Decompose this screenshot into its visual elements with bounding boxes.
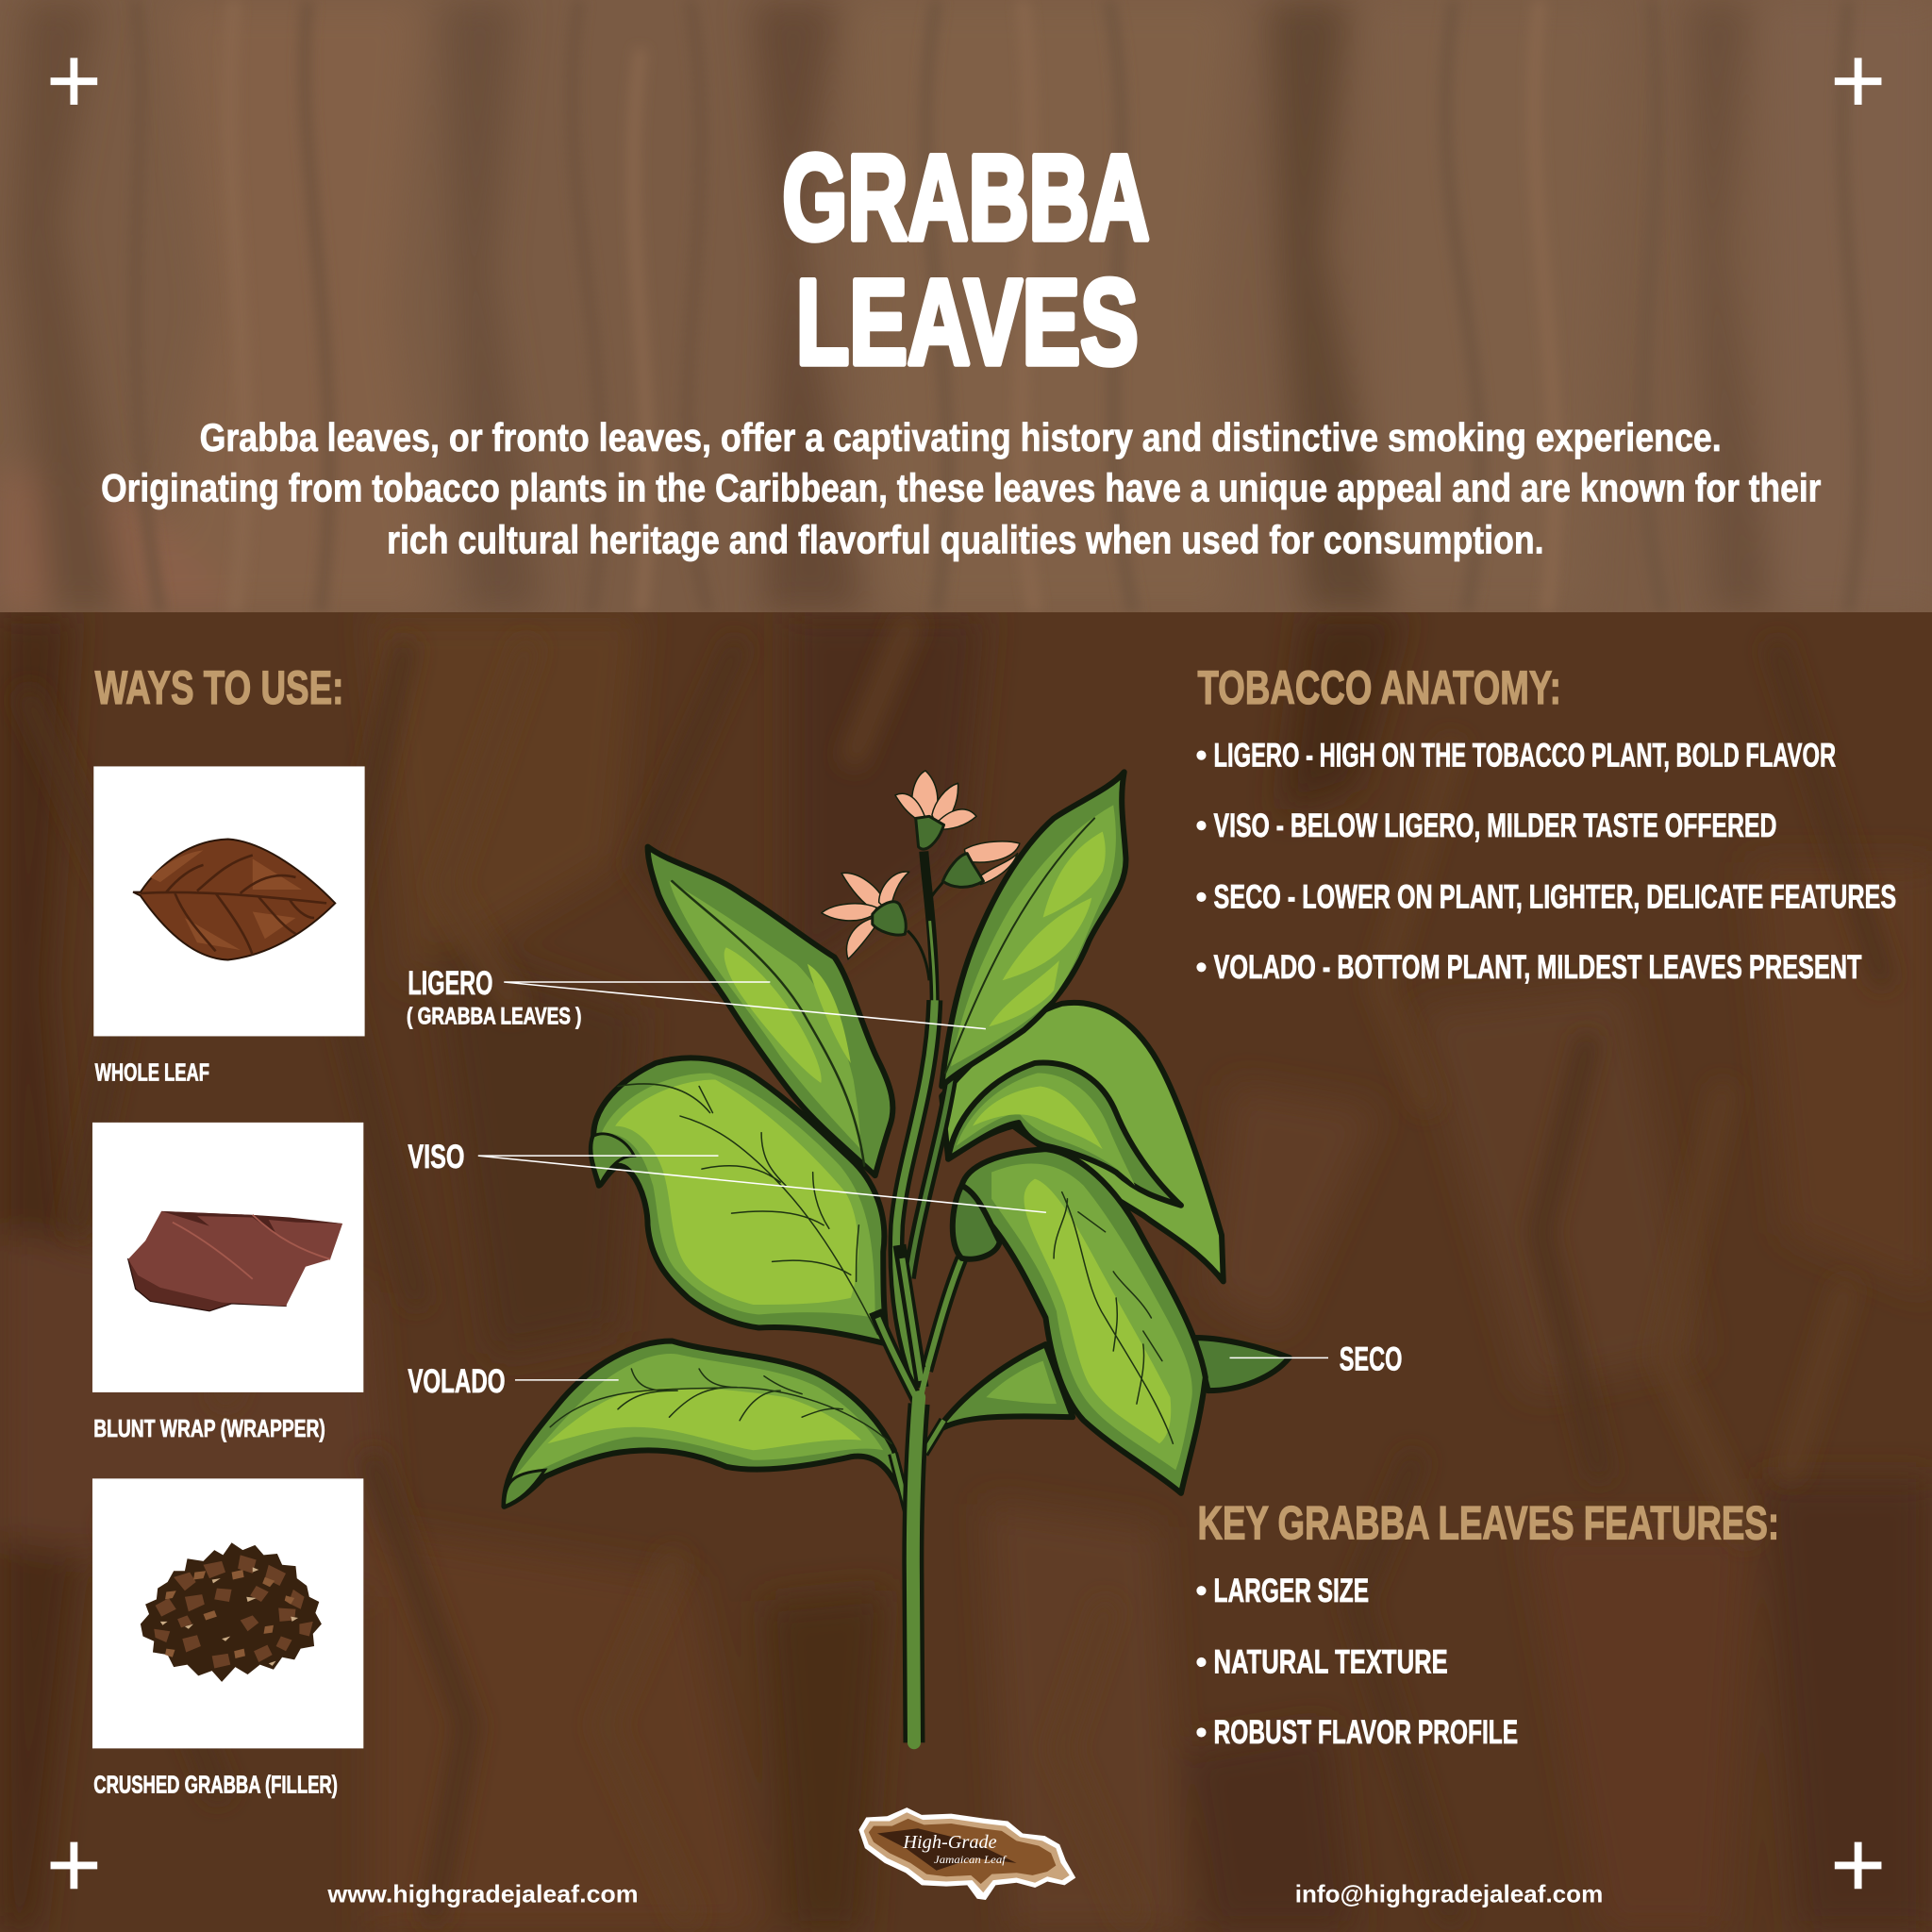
callout: ligero: LIGERO: [408, 965, 492, 1002]
callout: viso: [408, 1139, 1046, 1212]
leaf: viso upper right: [941, 1003, 1224, 1281]
card: crushed grabba: [92, 1478, 363, 1748]
title: GRABBA: [782, 130, 1150, 265]
callout: viso: VISO: [408, 1139, 464, 1175]
callout: volado: VOLADO: [408, 1363, 506, 1400]
caption: crushed grabba: CRUSHED GRABBA (FILLER): [93, 1770, 338, 1798]
intro paragraph: rich cultural heritage and flavorful qualities when used for consumption.: [387, 517, 1544, 561]
background: upper wood band: [0, 0, 1932, 612]
heading: tobacco anatomy: TOBACCO ANATOMY:: [1198, 661, 1561, 714]
leaf: seco: [935, 1338, 1290, 1434]
intro paragraph: Grabba leaves, or fronto leaves, offer a captivating history and distinctive smoking experience.: [200, 415, 1722, 459]
logo: high-grade jamaican leaf: Jamaican Leaf: [934, 1854, 1008, 1866]
icon: plus top left: [51, 58, 97, 105]
card: whole leaf: [93, 766, 365, 1036]
leaf: viso right: [953, 1149, 1206, 1493]
leaf: ligero left: [648, 847, 892, 1175]
list: features: [1197, 1573, 1518, 1751]
list: anatomy items: [1197, 737, 1896, 986]
card: blunt wrap: [92, 1123, 363, 1392]
leaf: volado: [504, 1341, 904, 1507]
flower: top: [895, 771, 976, 849]
logo: high-grade jamaican leaf: [858, 1807, 1075, 1900]
icon: plus top right: [1835, 58, 1881, 105]
callout: seco: SECO: [1340, 1341, 1402, 1377]
stems behind leaves: [896, 851, 961, 1384]
panel: tobacco anatomy: [1197, 661, 1896, 986]
callout: ligero: [407, 965, 986, 1029]
intro paragraph: [101, 415, 1821, 561]
panel: key features: [1197, 1496, 1779, 1751]
callout: ligero: ( GRABBA LEAVES ): [407, 1004, 581, 1029]
flower: right: [942, 841, 1020, 887]
logo: high-grade jamaican leaf: High-Grade: [902, 1833, 997, 1853]
list: features: ROBUST FLAVOR PROFILE: [1214, 1714, 1518, 1751]
background: lower wood band: [0, 612, 1932, 1932]
flower: left: [822, 872, 909, 959]
illustration: tobacco plant: [504, 771, 1290, 1742]
list: features: NATURAL TEXTURE: [1214, 1644, 1448, 1681]
caption: whole leaf: WHOLE LEAF: [95, 1058, 209, 1086]
footer: website: www.highgradejaleaf.com: [326, 1880, 639, 1908]
caption: blunt wrap: BLUNT WRAP (WRAPPER): [93, 1414, 325, 1442]
footer: email: info@highgradejaleaf.com: [1295, 1880, 1603, 1908]
title: [782, 130, 1150, 390]
icon: plus bottom right: [1835, 1842, 1881, 1889]
title: LEAVES: [796, 255, 1139, 390]
list: features: LARGER SIZE: [1214, 1573, 1369, 1609]
leaf: ligero right: [941, 772, 1125, 1086]
panel: ways to use: [92, 661, 365, 1798]
leaf: viso left: [591, 1058, 889, 1344]
icon: plus bottom left: [51, 1842, 97, 1889]
main stem: [875, 1245, 944, 1742]
heading: ways to use: WAYS TO USE:: [95, 661, 343, 714]
